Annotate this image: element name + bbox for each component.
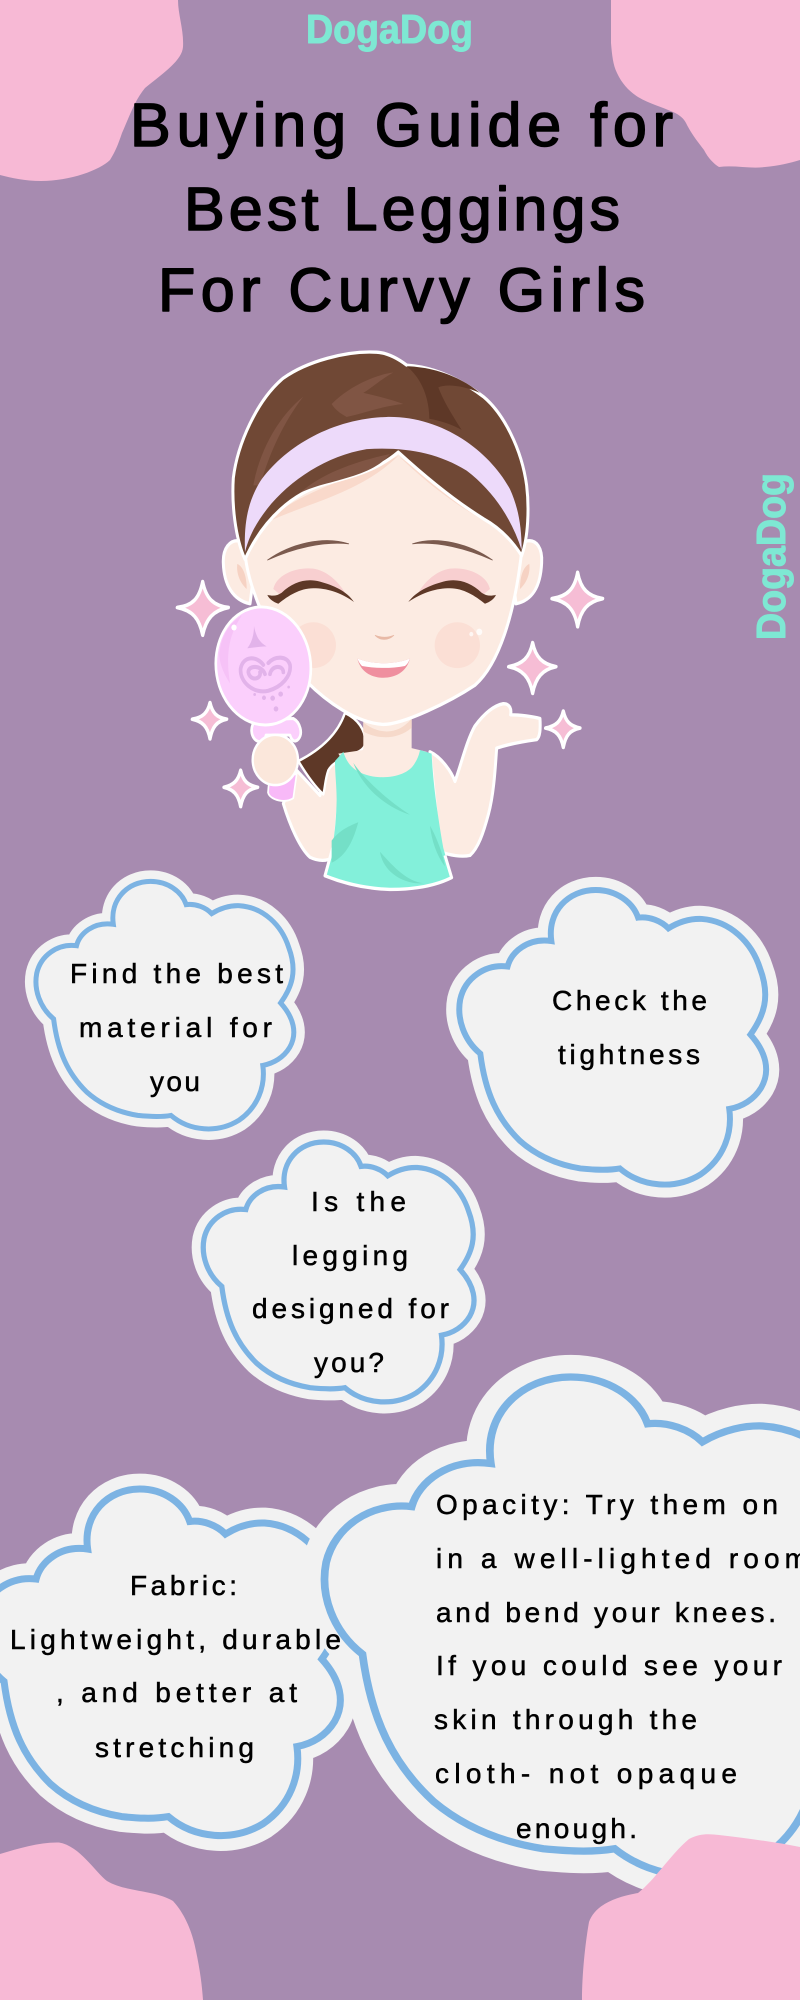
cloud: find the best material: Find the best: [70, 958, 283, 989]
ear: right: [510, 541, 542, 604]
hair: [233, 352, 528, 559]
cloud: is the legging designed for you: designed for: [252, 1293, 449, 1324]
tank top folds: [332, 763, 445, 883]
logo: DogaDog top: DogaDog: [306, 6, 473, 52]
mirror emblem: [247, 626, 267, 648]
cheeks: [291, 622, 336, 668]
eyes: [267, 580, 354, 604]
mirror: [207, 599, 319, 801]
cloud: find the best material: [36, 881, 294, 1129]
title: For Curvy Girls: [158, 256, 645, 324]
text: opacity: cloth- not opaque: [435, 1758, 737, 1789]
decorative blob: top left: [0, 0, 183, 181]
decorative blob: top right: [611, 0, 800, 168]
eyebrows: [267, 541, 349, 560]
text: opacity: [434, 1489, 800, 1844]
hand holding mirror: [253, 735, 298, 785]
ponytail: [298, 713, 365, 794]
tank top: [325, 750, 452, 889]
decorative blob: bottom left: [0, 1842, 203, 2000]
forehead shade: [260, 456, 493, 526]
title: [130, 91, 673, 324]
title: Buying Guide for: [130, 91, 673, 159]
text: fabric: , and better at: [56, 1677, 297, 1708]
text: opacity: enough.: [516, 1813, 637, 1844]
cloud: is the legging designed for you: legging: [292, 1240, 408, 1271]
hair shadow and highlights: [407, 366, 480, 430]
logo: DogaDog vertical: DogaDog: [748, 473, 794, 640]
cloud shape: opacity: [325, 1377, 800, 1876]
nose: [375, 635, 394, 639]
text: fabric: Lightweight, durable: [10, 1624, 341, 1655]
text: fabric: [10, 1570, 341, 1763]
illustration: girl with mirror: [177, 352, 603, 889]
face: [245, 441, 522, 724]
cloud: is the legging designed for you: Is the: [311, 1186, 406, 1217]
cloud shape: fabric: [0, 1489, 340, 1836]
headband: [245, 417, 522, 552]
cloud: find the best material: you: [150, 1066, 200, 1097]
decorative blob: bottom right: [582, 1834, 800, 2000]
cloud: is the legging designed for you: [203, 1142, 474, 1402]
arm: right with open hand: [430, 704, 540, 856]
icon: sparkles: [177, 572, 603, 807]
eye shadow: [273, 568, 345, 595]
mouth: [357, 659, 410, 678]
text: opacity: Opacity: Try them on: [436, 1489, 778, 1520]
text: opacity: If you could see your: [436, 1650, 782, 1681]
cloud: find the best material: material for: [79, 1012, 272, 1043]
cloud: is the legging designed for you: you?: [314, 1347, 384, 1378]
cloud: check the tightness: [459, 890, 766, 1185]
text: opacity: in a well-lighted room: [436, 1543, 800, 1574]
ear: left: [223, 541, 257, 604]
text: opacity: and bend your knees.: [436, 1597, 776, 1628]
text: fabric: stretching: [95, 1732, 254, 1763]
title: Best Leggings: [184, 175, 620, 243]
cloud: check the tightness: tightness: [558, 1039, 700, 1070]
text: opacity: skin through the: [434, 1704, 697, 1735]
text: fabric: Fabric:: [130, 1570, 237, 1601]
neck: [338, 711, 427, 778]
cloud: check the tightness: Check the: [552, 985, 707, 1016]
arm: left: [283, 752, 343, 860]
